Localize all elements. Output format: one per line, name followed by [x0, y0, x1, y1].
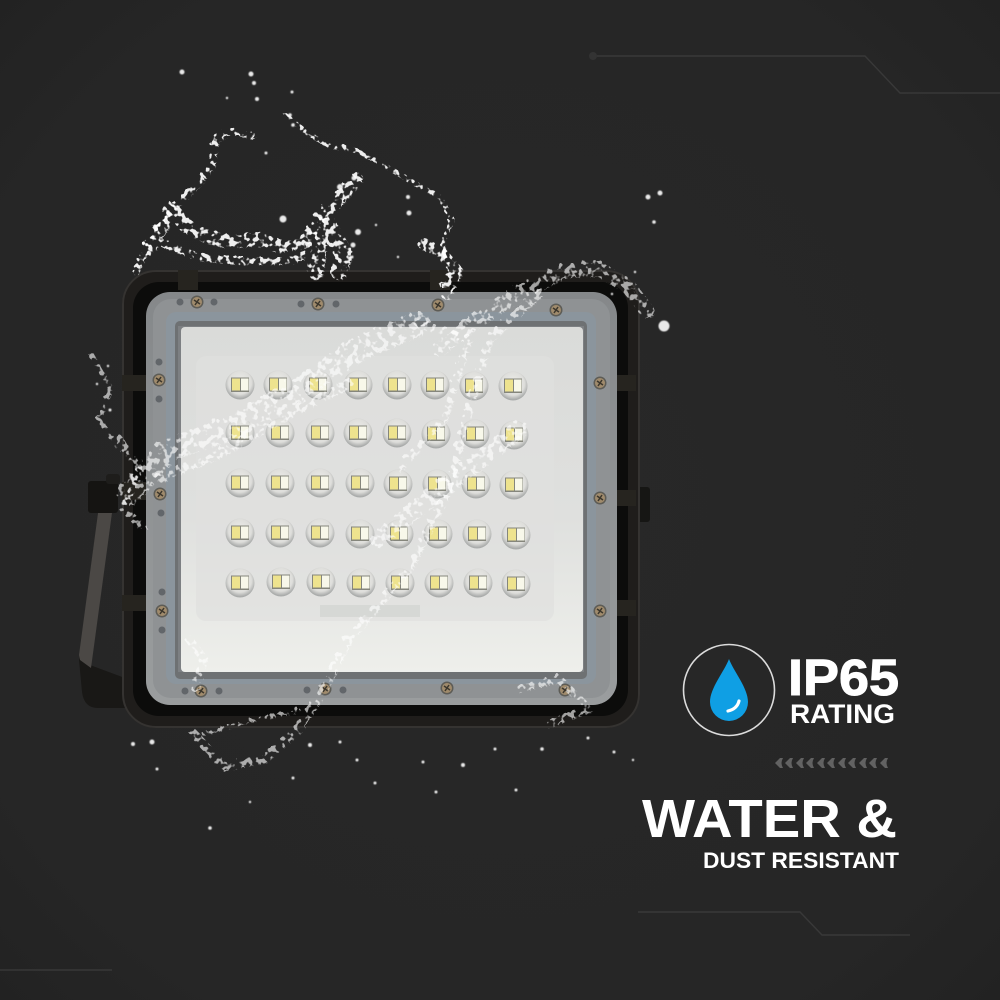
- screws and holes: [152, 296, 606, 698]
- subheading: DUST RESISTANT: DUST RESISTANT: [703, 848, 900, 873]
- icon: water drop in circle: [684, 644, 774, 736]
- badge: IP65 rating: [684, 644, 899, 736]
- heading: WATER &: WATER &: [642, 789, 897, 849]
- divider: chevron row: [775, 758, 888, 768]
- product: solar floodlight: [79, 270, 650, 728]
- droplets: [96, 70, 670, 830]
- label: RATING: RATING: [790, 699, 895, 729]
- heading: IP65: IP65: [788, 649, 899, 706]
- streams crossing the panel: [92, 270, 648, 768]
- mounting bracket: [79, 474, 650, 708]
- water splash: [92, 70, 670, 830]
- outer housing: [122, 270, 640, 728]
- white LED panel: [181, 327, 583, 672]
- grey gasket frame: [146, 292, 617, 705]
- LED array: [226, 370, 530, 598]
- splash streams above the fixture: [137, 117, 458, 295]
